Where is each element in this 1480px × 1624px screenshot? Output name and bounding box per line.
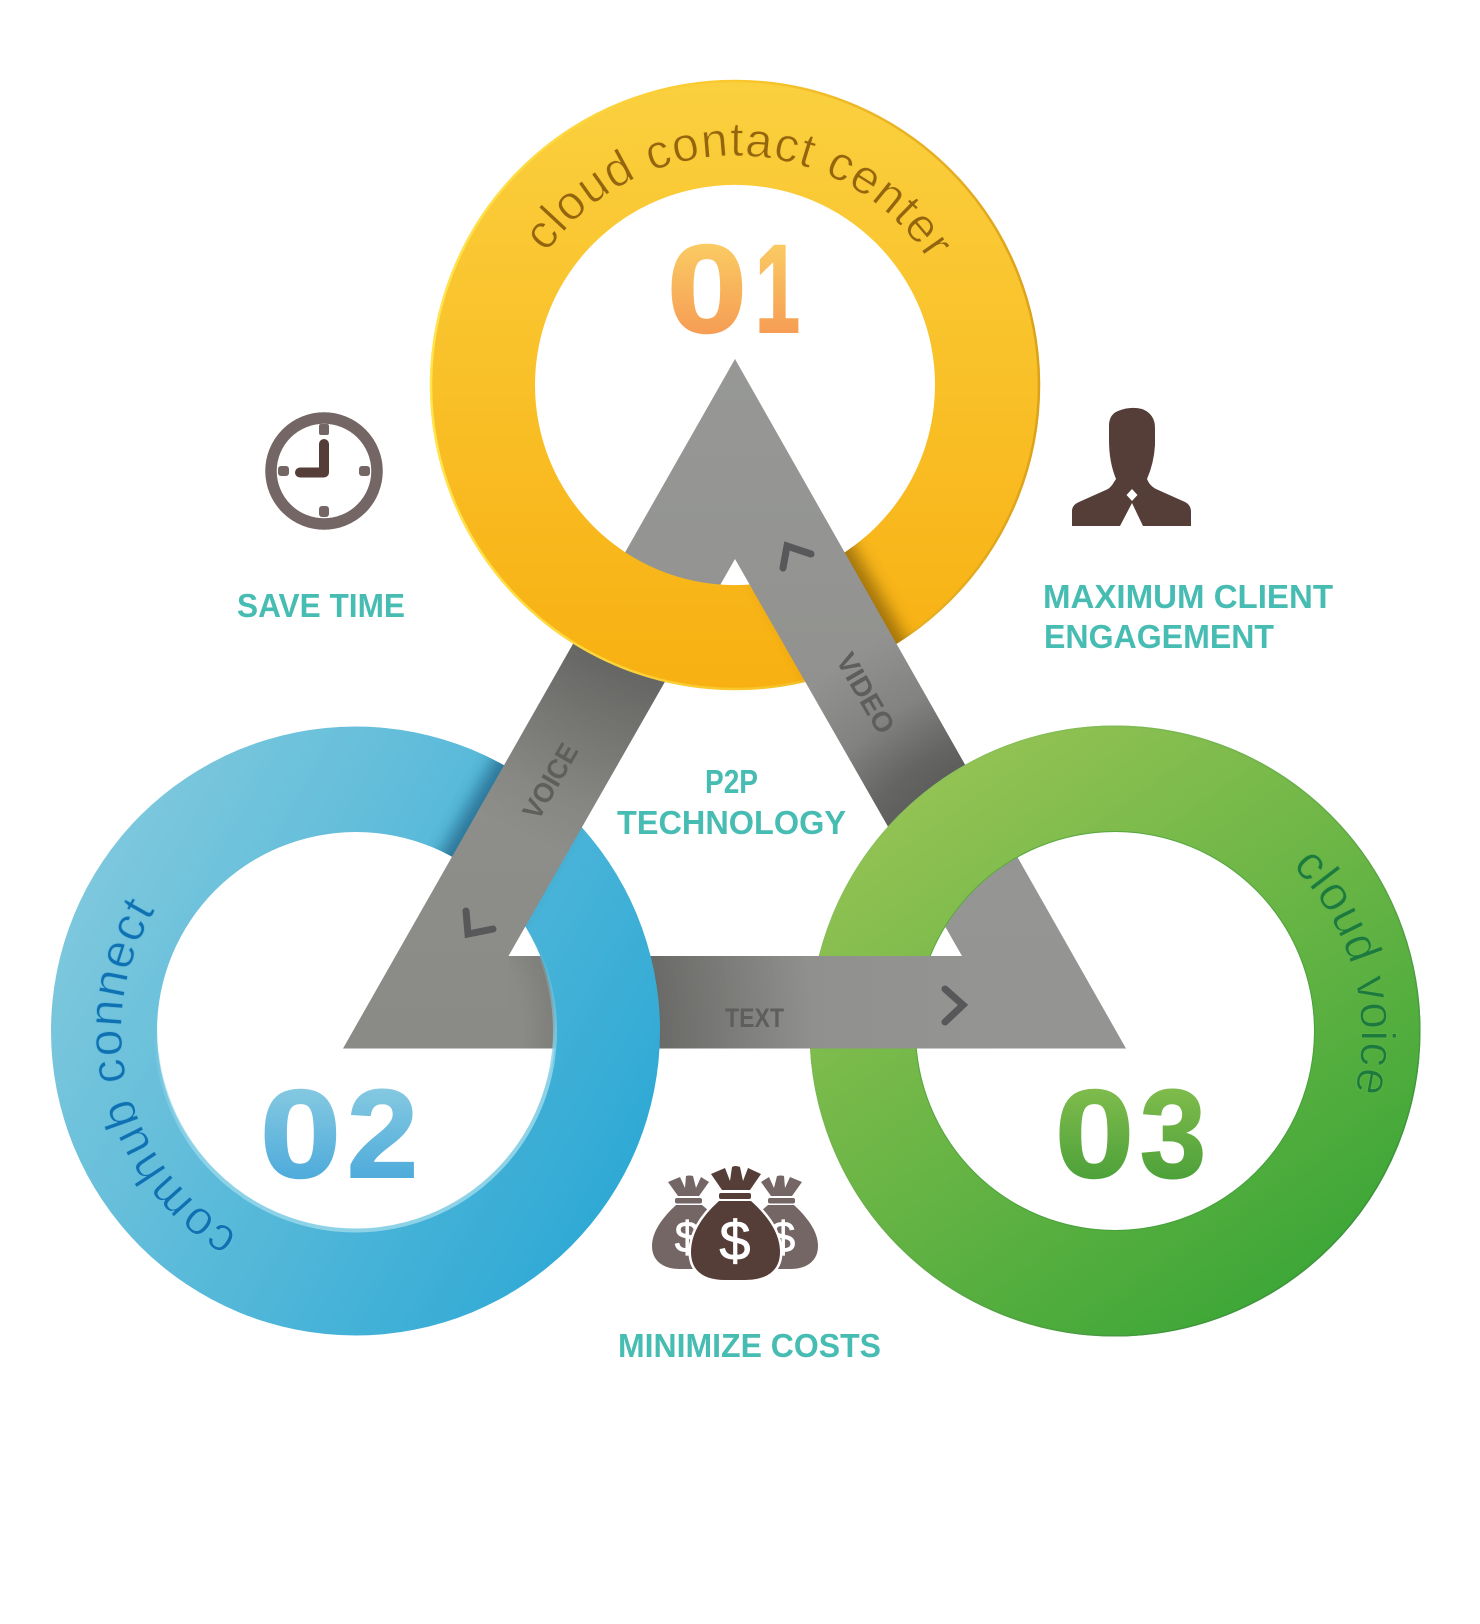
label: minimize costs: MINIMIZE COSTS: [618, 1327, 881, 1364]
arm label: VOICE: VOICE: [517, 738, 584, 825]
label: p2p technology: P2P: [705, 763, 758, 800]
label: maximum client engagement: MAXIMUM CLIENT: [1043, 578, 1333, 615]
label: maximum client engagement: ENGAGEMENT: [1044, 618, 1274, 655]
number 01: 1: [755, 220, 800, 359]
ring label: cloud contact center: cloud contact center: [532, 124, 949, 254]
label: p2p technology: TECHNOLOGY: [617, 804, 846, 841]
ring label: comhub connect: comhub connect: [96, 898, 233, 1250]
arrow: text arm chevron: [945, 989, 963, 1022]
icon: money bags: [652, 1166, 818, 1280]
icon: money bags: $: [675, 1213, 699, 1262]
left triangle leg: upper part under yellow ring: [528, 359, 745, 723]
number 02: 2: [347, 1065, 418, 1204]
number 03: 0: [1055, 1065, 1134, 1204]
blue ring: [51, 718, 660, 1336]
icon: business person: [1072, 408, 1191, 526]
infographic canvas: [51, 80, 1421, 1358]
number 02: [260, 1065, 418, 1204]
label: p2p technology: [617, 763, 846, 841]
number 01: [667, 220, 800, 359]
icon: clock: [271, 418, 377, 524]
left triangle leg: voice arm over blue ring: [343, 723, 641, 1048]
right triangle leg: video arm over yellow ring: [735, 359, 1126, 1048]
arm label: TEXT: TEXT: [725, 1003, 784, 1033]
green ring: [810, 726, 1420, 1336]
arrow: voice arm chevron: [466, 911, 493, 934]
number 03: [1055, 1065, 1206, 1204]
ring label: cloud voice: cloud voice: [1297, 854, 1396, 1094]
icon: money bags: $: [771, 1213, 795, 1262]
arm label: VIDEO: VIDEO: [830, 647, 901, 739]
number 02: 0: [260, 1065, 341, 1204]
label: save time: SAVE TIME: [237, 587, 405, 624]
label: maximum client engagement: [1043, 578, 1333, 655]
number 01: 0: [667, 220, 747, 359]
yellow ring: [430, 80, 1040, 690]
arrow: video arm chevron: [783, 546, 811, 568]
number 03: 3: [1140, 1065, 1206, 1204]
bottom triangle leg: text arm over green ring: [343, 956, 1126, 1048]
icon: money bags: $: [719, 1209, 751, 1272]
